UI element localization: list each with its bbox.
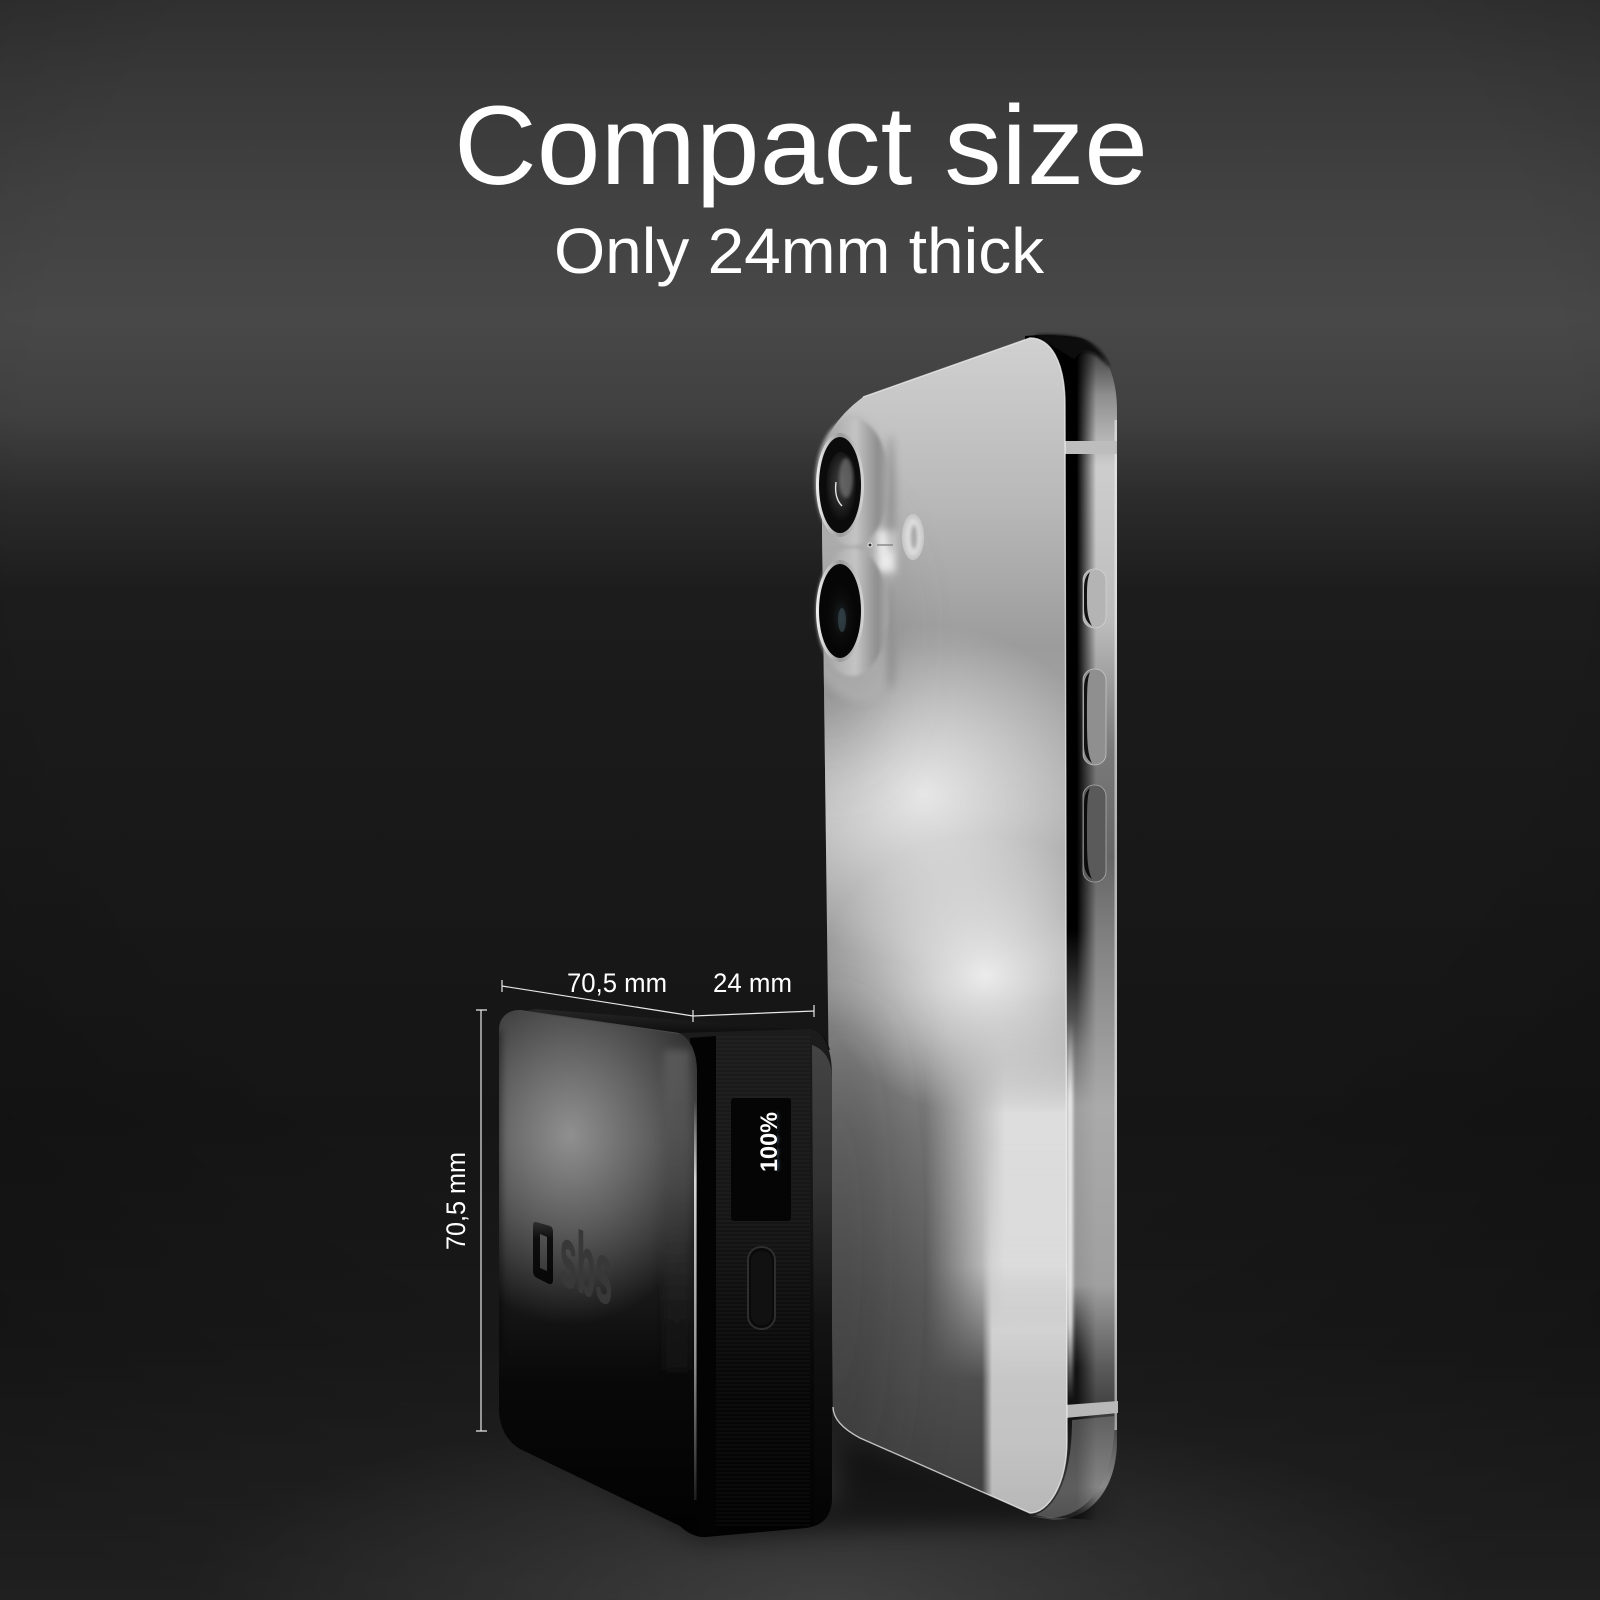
height line — [476, 1010, 487, 1431]
antenna band bottom — [1065, 1401, 1118, 1418]
button: volume down — [1083, 785, 1106, 882]
power button — [748, 1247, 775, 1329]
front edge highlight — [694, 1100, 696, 1500]
frame dark stripe — [1025, 335, 1096, 1520]
dimension: width — [502, 968, 693, 1022]
frame edge highlight — [1114, 420, 1117, 1430]
bottom camera — [816, 548, 888, 676]
power bank — [499, 1009, 832, 1538]
thickness label: 24 mm — [713, 968, 792, 998]
side bezel left — [690, 1036, 716, 1536]
top face — [520, 1009, 830, 1050]
title: Compact size — [454, 83, 1148, 208]
thickness line — [693, 1005, 814, 1017]
microphone dot — [868, 543, 872, 547]
front face — [499, 1010, 697, 1526]
phone back glass — [822, 338, 1067, 1513]
dimension: thickness — [693, 968, 814, 1017]
floor shadow — [505, 1425, 1120, 1540]
frame top dark corner — [1035, 335, 1110, 368]
button: volume up — [1083, 669, 1106, 765]
camera plateau — [815, 416, 897, 703]
phone — [813, 333, 1118, 1520]
sbs logo — [533, 1207, 612, 1324]
phone frame — [1025, 335, 1117, 1520]
logo wordmark: sbs — [560, 1207, 612, 1324]
display: 100% — [756, 1112, 783, 1172]
bottom frame metal — [1035, 1416, 1115, 1518]
side bezel right — [812, 1045, 832, 1526]
flash — [902, 514, 924, 560]
front top rim — [520, 1010, 679, 1033]
side panel — [679, 1029, 832, 1537]
glass white edge — [833, 338, 1067, 1513]
logo mark — [533, 1222, 553, 1284]
subtitle: Only 24mm thick — [554, 215, 1045, 287]
display — [731, 1098, 791, 1221]
dimension: height — [441, 1010, 487, 1431]
width label: 70,5 mm — [567, 968, 667, 998]
button: action — [1083, 569, 1106, 628]
top camera — [815, 418, 889, 546]
lower frame inner highlight — [1067, 1020, 1073, 1400]
hard lower part of bright band — [982, 1230, 1067, 1513]
antenna band top — [1065, 441, 1117, 454]
soft upper part of bright band — [930, 1023, 1066, 1370]
height label: 70,5 mm — [441, 1152, 471, 1250]
display: 100% — [756, 1112, 783, 1172]
side ribbed panel — [716, 1036, 810, 1526]
width line — [502, 980, 693, 1022]
